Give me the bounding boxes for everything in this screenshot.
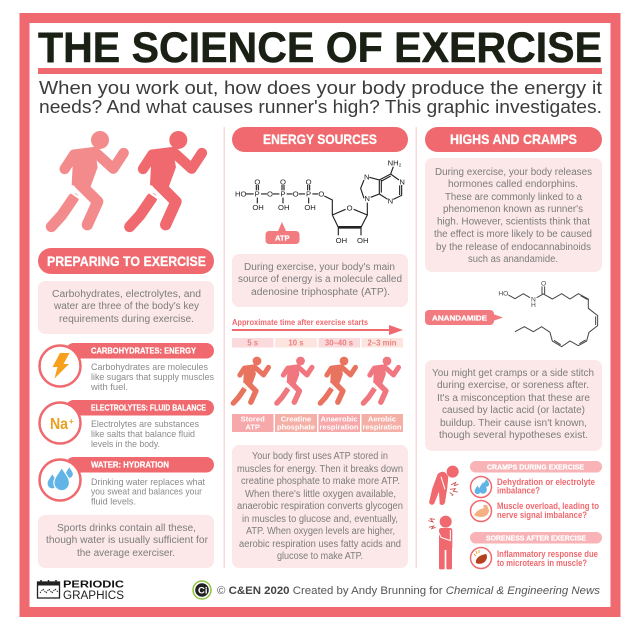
item: electrolytes: + — [69, 417, 74, 426]
panel: key requirements — [38, 281, 214, 334]
item: water: Drinking water replaces what — [91, 477, 205, 487]
panel: energy use: aerobic respiration uses fatty acids and — [239, 539, 401, 550]
chemical structure: anandamide — [498, 280, 598, 347]
logo: chemistry initiative — [193, 581, 211, 599]
item: muscle overload — [470, 500, 599, 522]
chemical structure: ATP: OH — [278, 203, 289, 212]
panel: energy use — [232, 445, 408, 568]
chemical structure: ATP: O — [254, 177, 260, 186]
item: electrolytes: ELECTROLYTES: FLUID BALANCE — [91, 402, 206, 412]
panel: ATP description: During exercise, your body's main — [244, 262, 395, 273]
icon: two runners — [51, 131, 202, 227]
energy stages: Aerobic — [368, 414, 396, 424]
panel: energy use: When there's little oxygen available, — [245, 489, 396, 500]
chemical structure: ATP: O — [318, 190, 324, 199]
item: water — [40, 457, 214, 506]
panel: ATP description: adenosine triphosphate (ATP). — [251, 287, 390, 298]
credit line: © C&EN 2020 Created by Andy Brunning for Chemical & Engineering News — [217, 585, 601, 597]
item: electrolytes — [40, 400, 214, 449]
chemical structure: ATP: HO — [235, 190, 247, 199]
chemical structure: anandamide: O — [541, 280, 546, 287]
title: THE SCIENCE OF EXERCISE — [38, 24, 602, 72]
chemical structure: anandamide: HO — [498, 291, 508, 298]
time labels: 2–3 min — [367, 338, 397, 348]
energy stages: phosphate — [277, 422, 315, 432]
chemical structure: ATP: P — [280, 190, 285, 199]
panel: cramps and soreness — [425, 360, 602, 451]
chemical structure: ATP: P — [306, 190, 311, 199]
panel: cramps and soreness: during exercise, or soreness after. — [437, 380, 589, 391]
item: inflammatory response: to microtears in muscle? — [497, 558, 587, 568]
panel: endorphins: phenomenon known as runner's — [443, 204, 583, 215]
subtitle: needs? And what causes runner's high? This graphic investigates. — [39, 96, 602, 117]
item: muscle overload: nerve signal imbalance? — [497, 510, 587, 520]
chemical structure: ATP: 2 — [399, 163, 402, 168]
energy stages: respiration — [362, 422, 402, 432]
icon: person with cramp — [429, 466, 459, 505]
time labels — [232, 338, 403, 348]
panel: energy use: Your body first uses ATP stored in — [252, 451, 388, 462]
logo: periodic graphics: GRAPHICS — [63, 590, 124, 602]
chemical structure: ATP: N — [388, 197, 393, 206]
chemical structure: ATP: N — [364, 172, 370, 181]
item: carbohydrates: with fuel. — [90, 382, 128, 392]
panel: cramps and soreness: caused by lactic acid (or lactate) — [442, 405, 585, 416]
item: muscle overload: Muscle overload, leading to — [497, 501, 599, 511]
chemical structure: ATP: O — [280, 177, 286, 186]
chemical structure: anandamide: N — [531, 296, 536, 303]
chemical structure: ATP: O — [347, 203, 353, 212]
panel: key requirements: Carbohydrates, electrolytes, and — [52, 289, 201, 300]
heading: highs and cramps — [425, 127, 602, 152]
chemical structure: ATP: OH — [252, 203, 264, 212]
heading: energy sources: ENERGY SOURCES — [263, 131, 377, 147]
callout: ATP — [266, 222, 300, 244]
callout: ATP: ATP — [275, 234, 290, 242]
panel: endorphins: high. However, scientists think that — [437, 216, 590, 228]
chemical structure: ATP: NH — [388, 158, 399, 167]
energy stages: ATP — [245, 422, 260, 432]
logo: chemistry initiative: Ci — [198, 586, 208, 596]
item: water: WATER: HYDRATION — [91, 460, 169, 470]
icon: person with soreness — [428, 516, 452, 569]
panel: cramps and soreness: It's a misconception that these are — [437, 393, 591, 404]
heading: preparing to exercise: PREPARING TO EXERCISE — [47, 253, 206, 269]
panel: ATP description: source of energy is a molecule called — [238, 274, 402, 285]
panel: endorphins: These are commonly linked to a — [445, 192, 583, 203]
chemical structure: ATP: N — [364, 194, 370, 203]
panel: endorphins: by the release of endocannabinoids — [436, 242, 591, 253]
panel: cramps and soreness: You might get cramps or a side stitch — [432, 368, 594, 379]
runners row — [233, 357, 399, 403]
logo: periodic graphics — [38, 578, 124, 602]
callout: anandamide: ANANDAMIDE — [432, 314, 487, 322]
time labels: 10 s — [288, 338, 304, 348]
subtitle — [39, 77, 602, 117]
timeline label: Approximate time after exercise starts — [232, 318, 369, 327]
item: carbohydrates: CARBOHYDRATES: ENERGY — [91, 346, 196, 356]
callout: anandamide — [425, 310, 503, 325]
panel: sports drinks — [38, 515, 214, 568]
item: electrolytes: like salts that balance fluid — [91, 429, 195, 439]
panel: key requirements: water are three of the body's key — [53, 301, 199, 312]
panel: energy use: muscles for energy. Then it breaks down — [237, 464, 403, 475]
chemical structure: ATP: O — [306, 177, 312, 186]
panel: key requirements: requirements during exercise. — [59, 314, 194, 325]
panel: cramps and soreness: though several hypotheses exist. — [439, 430, 588, 441]
item: inflammatory response — [470, 548, 598, 568]
item: carbohydrates: Carbohydrates are molecules — [91, 362, 208, 372]
item: dehydration: imbalance? — [497, 486, 540, 496]
panel: endorphins: hormones called endorphins. — [448, 179, 578, 190]
chemical structure: ATP: OH — [304, 203, 316, 212]
time labels: 30–40 s — [325, 338, 354, 348]
chemical structure: ATP: OH — [357, 236, 368, 245]
item: dehydration: Dehydration or electrolyte — [497, 477, 595, 487]
energy stages: Creatine — [281, 414, 311, 424]
timeline arrow — [232, 325, 403, 335]
logo: periodic graphics: PERIODIC — [63, 578, 124, 590]
item: carbohydrates: like sugars that supply muscles — [91, 372, 214, 382]
panel: endorphins: such as anandamide. — [468, 254, 558, 265]
heading: soreness after exercise — [470, 532, 602, 544]
item: carbohydrates — [40, 343, 214, 392]
panel: sports drinks: though water is usually sufficient for — [46, 535, 209, 546]
panel: energy use: glucose to make ATP. — [277, 551, 363, 562]
chemical structure: ATP: P — [255, 190, 260, 199]
energy stages: Stored — [241, 414, 265, 424]
chemical structure: ATP: OH — [336, 236, 347, 245]
item: water: fluid levels. — [91, 496, 136, 506]
heading: highs and cramps: HIGHS AND CRAMPS — [450, 131, 577, 147]
panel: endorphins — [425, 158, 602, 272]
item: electrolytes: levels in the body. — [91, 439, 160, 449]
chemical structure: ATP — [235, 158, 405, 245]
item: inflammatory response: Inflammatory response due — [497, 549, 598, 559]
energy stages: respiration — [320, 422, 359, 432]
heading: cramps during exercise: CRAMPS DURING EXERCISE — [487, 462, 584, 472]
item: dehydration — [470, 476, 595, 498]
chemical structure: ATP: O — [267, 190, 273, 199]
energy stages: Anaerobic — [320, 414, 358, 424]
item: electrolytes: Electrolytes are substances — [91, 419, 199, 429]
item: electrolytes: Na — [50, 416, 68, 433]
title rule — [38, 68, 602, 74]
panel: energy use: creatine phosphate to make more ATP. — [241, 476, 400, 487]
heading: preparing to exercise — [38, 248, 214, 274]
chemical structure: ATP: N — [399, 177, 405, 186]
heading: energy sources — [232, 127, 408, 152]
chemical structure: ATP: O — [293, 190, 299, 199]
heading: cramps during exercise — [470, 461, 602, 472]
panel: sports drinks: the average exerciser. — [77, 548, 175, 559]
panel: endorphins: During exercise, your body releases — [435, 167, 592, 178]
panel: ATP description — [232, 254, 408, 307]
heading: soreness after exercise: SORENESS AFTER EXERCISE — [486, 534, 586, 543]
panel: energy use: ATP. When oxygen levels are higher, — [246, 526, 395, 537]
panel: endorphins: the effect is more likely to be caused — [434, 229, 592, 240]
panel: energy use: anaerobic respiration converts glycogen — [237, 501, 403, 512]
panel: sports drinks: Sports drinks contain all these, — [57, 523, 196, 534]
panel: energy use: in muscles to glucose and, eventually, — [242, 514, 398, 525]
subtitle: When you work out, how does your body produce the energy it — [39, 77, 602, 98]
time labels: 5 s — [247, 338, 259, 348]
panel: cramps and soreness: buildup. Their cause isn't known, — [440, 418, 587, 429]
item: water: you sweat and balances your — [91, 486, 202, 496]
energy stages — [232, 414, 403, 432]
chemical structure: anandamide: H — [531, 302, 536, 309]
